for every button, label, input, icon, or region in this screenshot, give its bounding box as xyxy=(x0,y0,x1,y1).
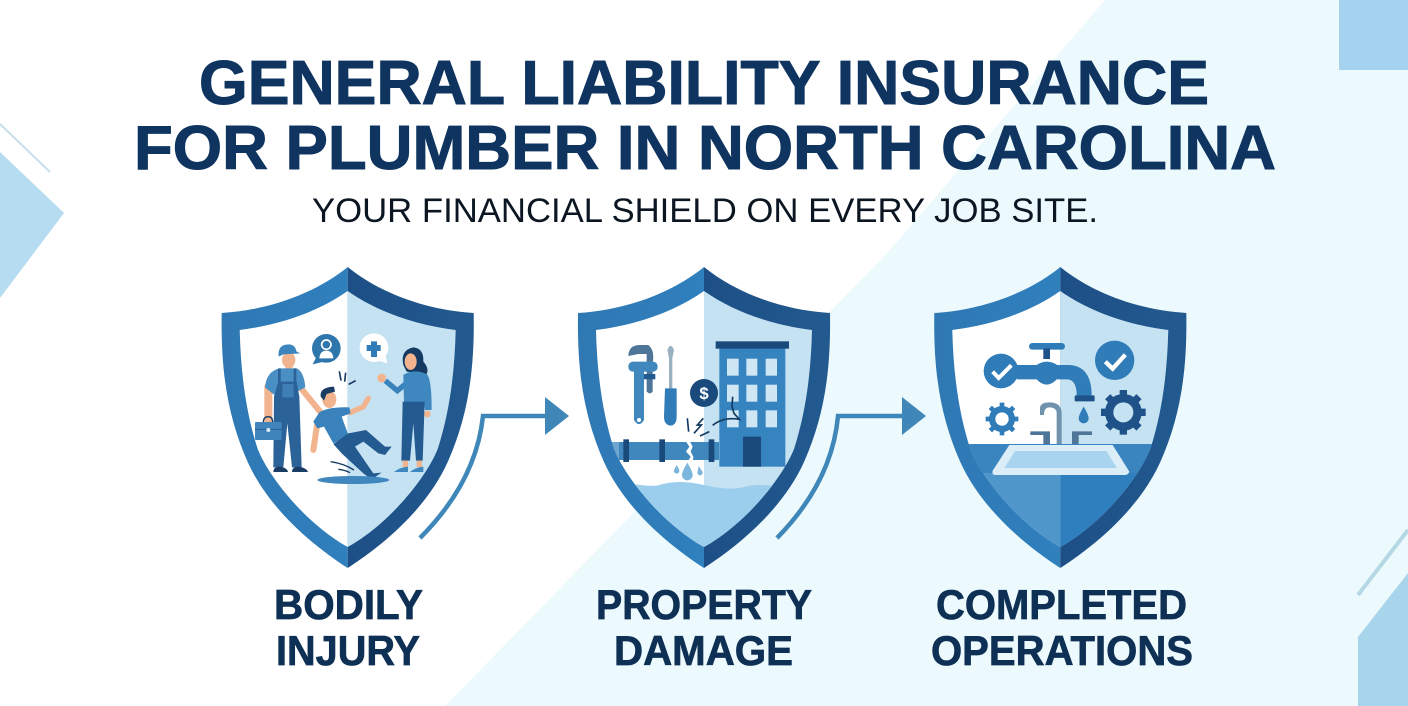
label: bodily injury xyxy=(274,581,423,674)
icon: faucet xyxy=(1017,343,1095,401)
label: bodily injury: INJURY xyxy=(276,627,420,674)
shield: property damage xyxy=(578,267,830,568)
icon: screwdriver xyxy=(664,346,677,426)
label: property damage: PROPERTY xyxy=(596,581,812,628)
arrow: injury to property xyxy=(420,397,569,538)
label: completed operations xyxy=(931,581,1193,674)
icon: person speech bubble xyxy=(312,334,341,364)
background: pale diagonal panel xyxy=(445,0,1408,706)
icon: dollar coin: $ xyxy=(699,384,709,403)
icon: check badge right xyxy=(1095,341,1134,380)
decoration: top right square xyxy=(1339,0,1408,70)
label: property damage xyxy=(596,581,812,674)
illustration: lower counter xyxy=(968,444,1152,547)
illustration: flood water xyxy=(635,482,772,547)
illustration: sink basin xyxy=(992,445,1129,475)
icon: small gear xyxy=(986,403,1018,435)
illustration: pipe xyxy=(612,442,719,460)
title: GENERAL LIABILITY INSURANCE xyxy=(199,49,1209,118)
icon: large gear xyxy=(1101,390,1146,435)
decoration: left diamond xyxy=(0,124,64,298)
label: completed operations: OPERATIONS xyxy=(931,627,1193,674)
illustration: falling man xyxy=(313,371,392,479)
label: completed operations: COMPLETED xyxy=(936,581,1187,628)
label: property damage: DAMAGE xyxy=(614,627,793,674)
label: bodily injury: BODILY xyxy=(274,581,423,628)
shield: bodily injury xyxy=(222,267,474,568)
decoration: bottom right shape xyxy=(1358,530,1408,706)
title xyxy=(134,49,1276,183)
title: FOR PLUMBER IN NORTH CAROLINA xyxy=(134,114,1276,183)
icon: pipe wrench xyxy=(628,345,658,424)
icon: check badge left xyxy=(984,354,1018,388)
illustration: water puddle xyxy=(317,476,389,484)
icon: medical cross bubble xyxy=(360,333,388,363)
shield: completed operations xyxy=(934,267,1186,568)
icon: dollar coin xyxy=(690,379,718,407)
icon: water drop xyxy=(1079,407,1089,423)
illustration: building xyxy=(713,341,789,467)
illustration: plumber xyxy=(255,344,321,472)
illustration: sink tap xyxy=(1030,402,1092,444)
illustration: woman xyxy=(377,347,432,472)
subtitle: YOUR FINANCIAL SHIELD ON EVERY JOB SITE. xyxy=(312,192,1098,230)
illustration: pipe break xyxy=(623,418,714,463)
icon: water drops xyxy=(674,463,703,480)
arrow: property to completed xyxy=(777,397,926,538)
